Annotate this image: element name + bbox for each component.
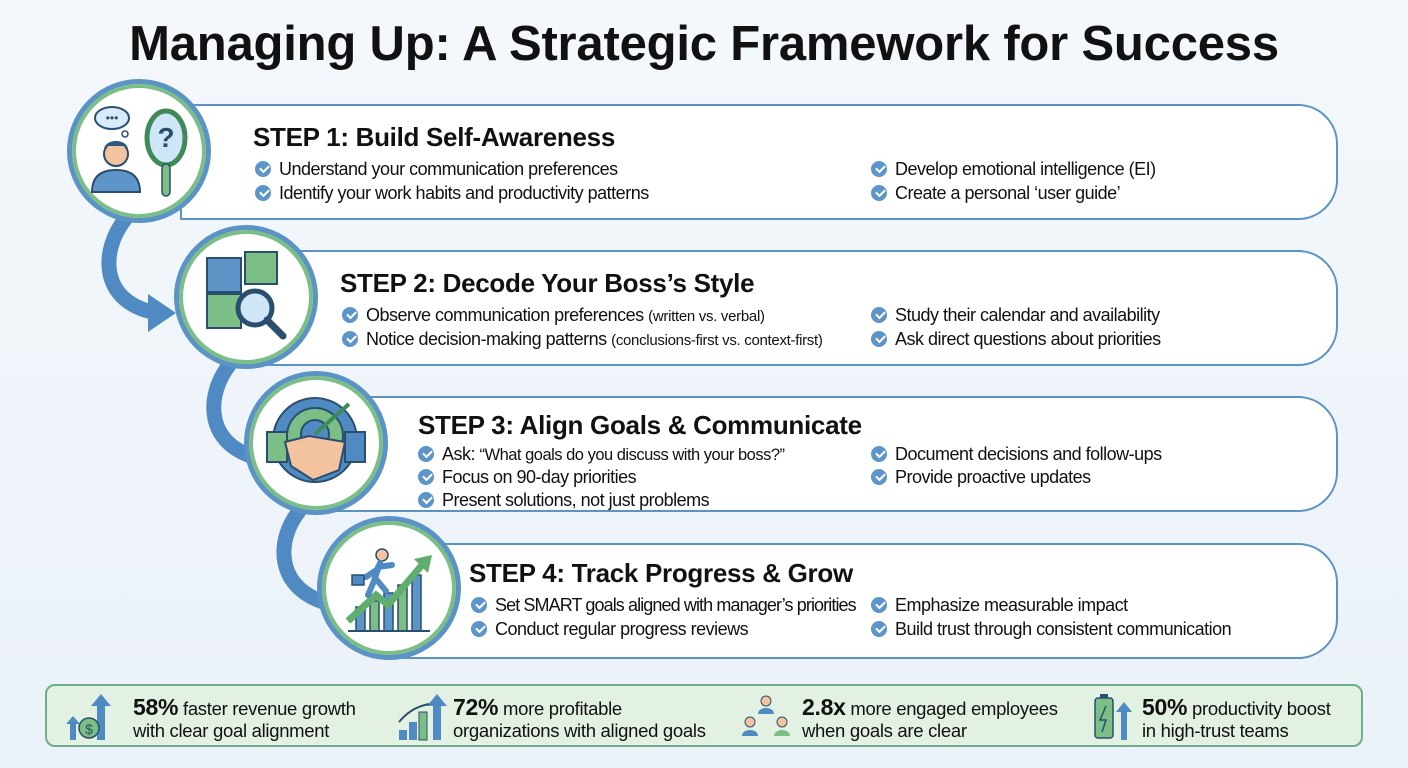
stat: productivity boost: in high-trust teams (1142, 720, 1288, 741)
panel: step 4: Conduct regular progress reviews (495, 619, 748, 639)
title: Managing Up: A Strategic Framework for Success (129, 17, 1279, 71)
panel: step 3: Focus on 90-day priorities (442, 467, 636, 487)
stat: engaged employees (742, 694, 1058, 741)
panel: step 4 (400, 543, 1338, 659)
stat: revenue growth (66, 694, 356, 741)
panel: step 4: Set SMART goals aligned with manager’s priorities (495, 595, 856, 615)
panel: step 2: Ask direct questions about priorities (895, 329, 1161, 349)
panel: step 3: Document decisions and follow-ups (895, 444, 1162, 464)
panel: step 3: Ask: “What goals do you discuss with your boss?” (442, 444, 784, 464)
panel: step 1: Develop emotional intelligence (EI) (895, 159, 1156, 179)
panel: step 3: STEP 3: Align Goals & Communicate (418, 410, 862, 440)
panel: step 2: Study their calendar and availability (895, 305, 1160, 325)
panel: step 4: Build trust through consistent communication (895, 619, 1231, 639)
stat: engaged employees: when goals are clear (802, 720, 967, 741)
icon: climbing growth chart (317, 516, 461, 660)
stat: engaged employees: 2.8x more engaged employees (802, 694, 1058, 720)
icon: person with mirror: ? (157, 122, 175, 153)
panel: step 1: Understand your communication preferences (279, 159, 618, 179)
stat: profitable organizations: organizations with aligned goals (453, 720, 706, 741)
icon: person with mirror (67, 79, 211, 223)
stat: revenue growth: 58% faster revenue growth (133, 694, 356, 720)
icon: target and handshake (244, 371, 388, 515)
panel: step 3: Present solutions, not just problems (442, 490, 709, 510)
stat: revenue growth: with clear goal alignment (133, 720, 329, 741)
panel: step 3: Provide proactive updates (895, 467, 1091, 487)
stat: productivity boost (1094, 694, 1331, 741)
stat: revenue growth: $ (85, 721, 93, 737)
icon: puzzle and magnifier (174, 225, 318, 369)
panel: step 2: STEP 2: Decode Your Boss’s Style (340, 268, 754, 298)
panel: step 1: Identify your work habits and productivity patterns (279, 183, 649, 203)
panel: step 2: Observe communication preferences (written vs. verbal) (366, 305, 765, 325)
icon: person with mirror: ••• (106, 111, 118, 125)
panel: step 3 (330, 396, 1338, 512)
panel: step 4: Emphasize measurable impact (895, 595, 1128, 615)
panel: statistics bar (45, 684, 1363, 747)
stat: productivity boost: 50% productivity boost (1142, 694, 1331, 720)
panel: step 1: STEP 1: Build Self-Awareness (253, 122, 615, 152)
panel: step 1: Create a personal ‘user guide’ (895, 183, 1120, 203)
stat: profitable organizations: 72% more profitable (453, 694, 622, 720)
stat: profitable organizations (398, 694, 706, 741)
panel: step 1 (180, 104, 1338, 220)
panel: step 2 (260, 250, 1338, 366)
panel: step 2: Notice decision-making patterns (conclusions-first vs. context-first) (366, 329, 823, 349)
panel: step 4: STEP 4: Track Progress & Grow (469, 558, 853, 588)
